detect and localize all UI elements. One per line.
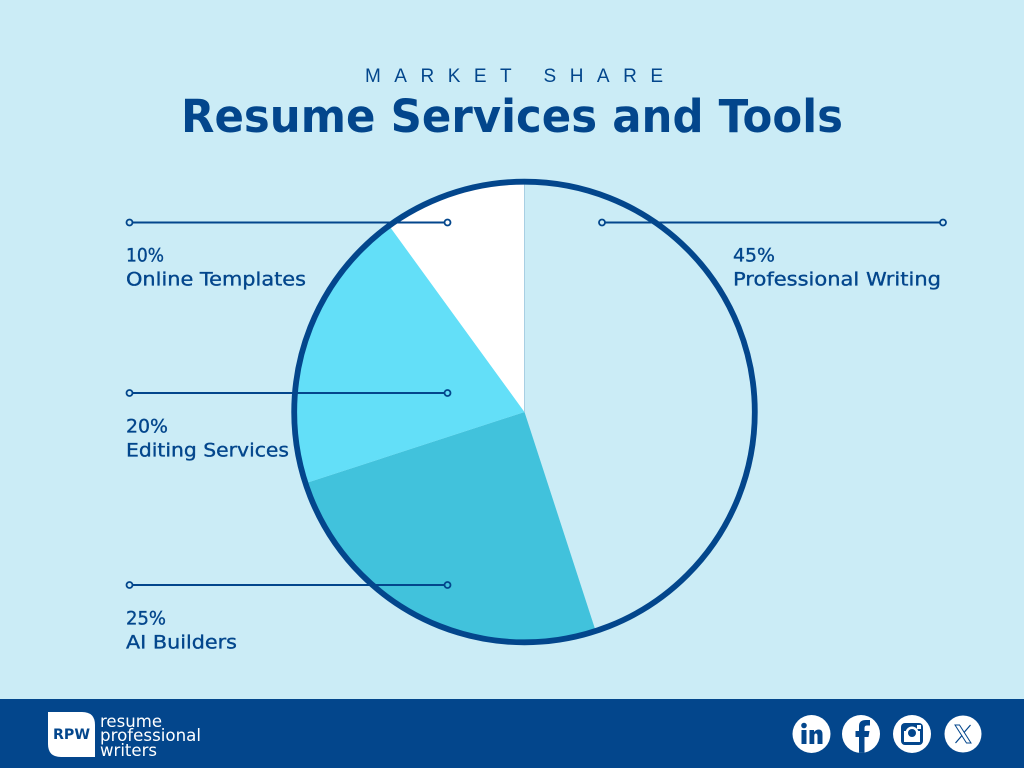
logo wordmark: resume	[100, 712, 162, 732]
callout: professional writing: Professional Writing	[733, 268, 941, 290]
icon: instagram	[893, 715, 931, 753]
logo wordmark: writers	[100, 741, 157, 761]
pie chart	[294, 182, 755, 642]
callout: online templates: Online Templates	[126, 268, 306, 290]
callout: editing services	[126, 390, 450, 462]
icon: linkedin	[792, 715, 830, 753]
slice: professional writing 45%	[524, 182, 754, 631]
logo	[48, 712, 201, 761]
slice: AI builders 25%	[306, 412, 596, 642]
callout: AI builders	[126, 582, 450, 654]
logo wordmark: professional	[100, 726, 201, 746]
logo badge: RPW	[53, 727, 90, 743]
slice: editing services 20%	[295, 226, 524, 483]
icon: facebook	[842, 715, 880, 753]
callout: professional writing: 45%	[733, 244, 775, 266]
callout: AI builders: 25%	[126, 608, 166, 630]
callout: online templates	[126, 220, 450, 290]
logo badge	[48, 712, 95, 757]
pie outline	[294, 182, 755, 642]
slice: online templates 10%	[389, 182, 524, 412]
callout: AI builders: AI Builders	[126, 632, 237, 654]
title: Resume Services and Tools	[181, 90, 843, 143]
footer bar	[0, 699, 1024, 768]
icon: X	[944, 716, 982, 752]
logo wordmark	[100, 712, 201, 761]
callout: editing services: Editing Services	[126, 440, 289, 462]
callout: online templates: 10%	[126, 244, 164, 266]
eyebrow heading: MARKET SHARE	[365, 66, 663, 87]
callout: professional writing	[599, 220, 946, 290]
callout: editing services: 20%	[126, 416, 168, 438]
